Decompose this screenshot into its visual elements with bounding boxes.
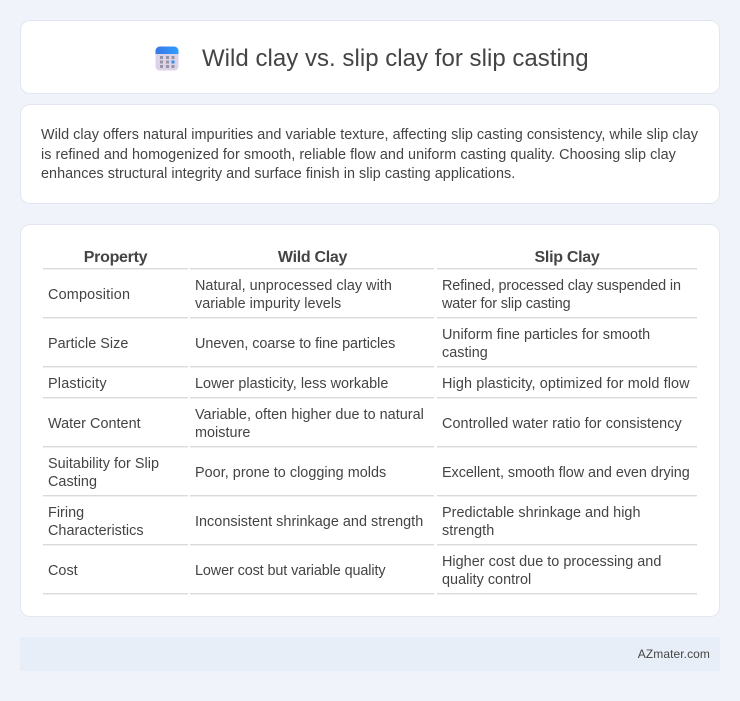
row: Water Content: Variable, often higher due to natural: [195, 407, 424, 423]
row: Plasticity: Plasticity: [48, 376, 107, 392]
footer bar: [20, 637, 720, 671]
row: Water Content: Controlled water ratio for consistency: [442, 416, 682, 432]
table header: Property: Property: [84, 249, 147, 266]
row: Suitability for Slip Casting: Casting: [48, 474, 97, 490]
row: Particle Size: casting: [442, 345, 488, 361]
row: Particle Size: Particle Size: [48, 336, 128, 352]
row: Suitability for Slip Casting: Suitability for Slip: [48, 456, 159, 472]
icon: calendar: [156, 46, 178, 70]
row: Composition: Composition: [48, 287, 130, 303]
row: Cost: Higher cost due to processing and: [442, 554, 661, 570]
summary text: [41, 127, 698, 182]
row: Firing Characteristics: Firing: [48, 505, 84, 521]
summary text: is refined and homogenized for smooth, reliable flow and uniform casting quality. Choosing slip clay: [41, 146, 676, 162]
row: Suitability for Slip Casting: Poor, prone to clogging molds: [195, 465, 386, 481]
row: Composition: Natural, unprocessed clay with: [195, 278, 392, 294]
row: Cost: Cost: [48, 563, 78, 579]
row: Particle Size: [48, 327, 650, 361]
title: Wild clay vs. slip clay for slip casting: [202, 45, 589, 72]
row: Firing Characteristics: Characteristics: [48, 523, 144, 539]
row: Suitability for Slip Casting: [48, 456, 690, 490]
table header: Slip Clay: Slip Clay: [535, 249, 599, 266]
row: Water Content: [48, 407, 682, 441]
summary text: enhances structural integrity and surface finish in slip casting applications.: [41, 166, 515, 182]
table: comparison: [43, 248, 698, 595]
row: Firing Characteristics: Predictable shrinkage and high: [442, 505, 641, 521]
row: Firing Characteristics: [48, 505, 641, 539]
summary text: Wild clay offers natural impurities and variable texture, affecting slip casting consistency, while slip clay: [41, 127, 698, 143]
row: Particle Size: Uneven, coarse to fine particles: [195, 336, 395, 352]
row: Particle Size: Uniform fine particles for smooth: [442, 327, 650, 343]
row: Cost: [48, 554, 661, 588]
row: Composition: Refined, processed clay suspended in: [442, 278, 681, 294]
row: Composition: [48, 278, 681, 312]
row: Plasticity: [48, 376, 690, 392]
row: Composition: water for slip casting: [442, 296, 571, 312]
row: Water Content: moisture: [195, 425, 250, 441]
row: Firing Characteristics: Inconsistent shrinkage and strength: [195, 514, 423, 530]
panel: title card: [20, 20, 720, 94]
table header: Wild Clay: Wild Clay: [278, 249, 347, 266]
row: Cost: quality control: [442, 572, 531, 588]
footer credit: AZmater.com: [638, 647, 710, 661]
row: Plasticity: High plasticity, optimized for mold flow: [442, 376, 690, 392]
row: Water Content: Water Content: [48, 416, 141, 432]
row: Composition: variable impurity levels: [195, 296, 341, 312]
panel: comparison table card: [20, 224, 720, 617]
row: Firing Characteristics: strength: [442, 523, 494, 539]
panel: summary card: [20, 104, 720, 204]
row: Plasticity: Lower plasticity, less workable: [195, 376, 388, 392]
row: Suitability for Slip Casting: Excellent, smooth flow and even drying: [442, 465, 690, 481]
row: Cost: Lower cost but variable quality: [195, 563, 385, 579]
